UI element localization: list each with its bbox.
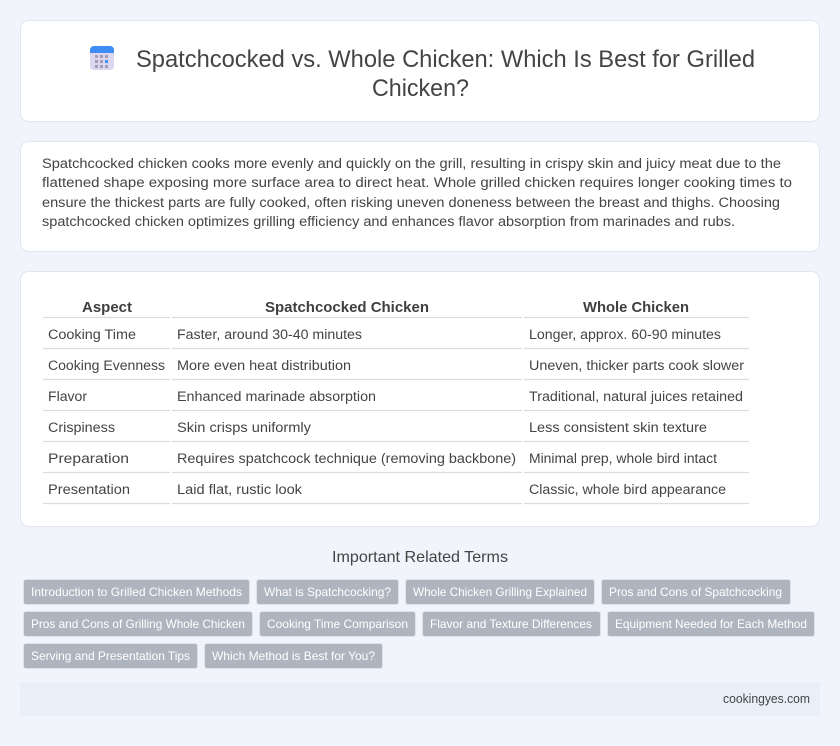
tag	[204, 644, 382, 668]
row: preparation: Requires spatchcock technique (removing backbone)	[177, 451, 516, 467]
row: cooking time	[48, 327, 721, 343]
tag	[24, 644, 198, 668]
header panel	[20, 20, 820, 122]
row: flavor	[48, 389, 743, 405]
table header: Spatchcocked Chicken	[265, 299, 429, 316]
row: cooking time: Longer, approx. 60-90 minutes	[529, 327, 721, 343]
tag: Whole Chicken Grilling Explained	[413, 585, 587, 599]
row: cooking evenness: More even heat distribution	[177, 358, 351, 374]
row: cooking evenness: Cooking Evenness	[48, 358, 165, 374]
row: cooking evenness	[48, 358, 744, 374]
row: cooking time: Cooking Time	[48, 327, 136, 343]
row: crispiness: Skin crisps uniformly	[177, 420, 312, 436]
tag: Equipment Needed for Each Method	[615, 617, 807, 631]
row: cooking time: Faster, around 30-40 minutes	[177, 327, 362, 343]
row: flavor: Flavor	[48, 389, 87, 405]
related terms heading: Important Related Terms	[332, 549, 508, 566]
row: crispiness	[48, 420, 707, 436]
row: presentation: Presentation	[48, 482, 130, 498]
tag: Flavor and Texture Differences	[430, 617, 592, 631]
row: crispiness: Crispiness	[48, 420, 115, 436]
row: preparation	[48, 451, 717, 467]
row: crispiness: Less consistent skin texture	[529, 420, 707, 436]
comparison table panel	[20, 272, 820, 526]
tag	[256, 580, 398, 604]
tag: Which Method is Best for You?	[212, 649, 375, 663]
tag: Cooking Time Comparison	[267, 617, 408, 631]
row: presentation	[48, 482, 726, 498]
tag: Pros and Cons of Spatchcocking	[609, 585, 782, 599]
tag: Pros and Cons of Grilling Whole Chicken	[31, 617, 245, 631]
row: preparation: Preparation	[48, 451, 129, 467]
row: presentation: Classic, whole bird appearance	[529, 482, 726, 498]
tag	[406, 580, 594, 604]
table header	[82, 299, 689, 316]
tag	[422, 612, 600, 636]
tag	[602, 580, 790, 604]
tag	[24, 580, 250, 604]
summary text: spatchcocked chicken optimizes grilling efficiency and enhances flavor absorption from marinades and rubs.	[42, 214, 735, 230]
summary text: ensure the thickest parts are fully cooked, often risking uneven doneness between the breast and thighs. Choosing	[42, 195, 780, 211]
summary text: flattened shape exposing more surface area to direct heat. Whole grilled chicken requires longer cooking times to	[42, 175, 792, 191]
tag: Serving and Presentation Tips	[31, 649, 190, 663]
row: flavor: Enhanced marinade absorption	[177, 389, 376, 405]
tag	[608, 612, 814, 636]
icon: calendar	[90, 46, 114, 70]
footer: cookingyes.com	[723, 692, 810, 706]
summary text	[42, 156, 792, 230]
related terms tags	[24, 580, 814, 668]
title: Chicken?	[372, 75, 469, 102]
row: preparation: Minimal prep, whole bird intact	[529, 451, 717, 467]
title	[136, 46, 755, 102]
tag: What is Spatchcocking?	[264, 585, 391, 599]
row: flavor: Traditional, natural juices retained	[529, 389, 743, 405]
summary panel	[20, 142, 820, 252]
tag	[24, 612, 252, 636]
footer	[20, 682, 820, 716]
tag	[260, 612, 416, 636]
table header: Aspect	[82, 299, 132, 316]
summary text: Spatchcocked chicken cooks more evenly and quickly on the grill, resulting in crispy skin and juicy meat due to the	[42, 156, 781, 172]
row: cooking evenness: Uneven, thicker parts cook slower	[529, 358, 744, 374]
table header: Whole Chicken	[583, 299, 689, 316]
row: presentation: Laid flat, rustic look	[177, 482, 303, 498]
tag: Introduction to Grilled Chicken Methods	[31, 585, 242, 599]
title: Spatchcocked vs. Whole Chicken: Which Is Best for Grilled	[136, 46, 755, 73]
